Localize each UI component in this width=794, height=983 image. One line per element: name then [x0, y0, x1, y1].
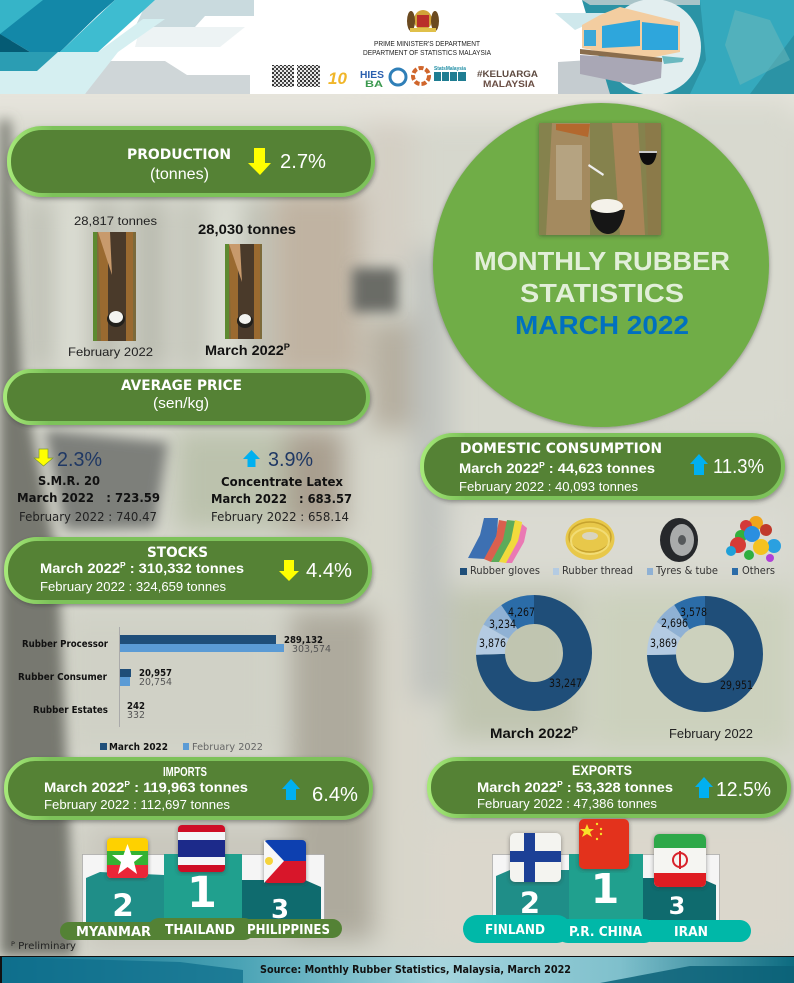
exports text: [477, 763, 673, 811]
podium: import sources: 3: [271, 895, 289, 925]
bars: rubber consumer: 20,754: [139, 677, 172, 688]
chart legend: March 2022: [109, 742, 168, 753]
country labels: IRAN: [674, 925, 708, 940]
country labels: [60, 918, 342, 940]
donut chart: March 2022: 33,247: [549, 676, 582, 690]
stocks text: STOCKS: [147, 545, 208, 561]
bars: rubber processor: 303,574: [292, 644, 331, 655]
exports text: P: [557, 780, 563, 789]
donut chart: February 2022: 2,696: [661, 616, 688, 630]
production heading: [127, 147, 231, 183]
donut chart: February 2022: February 2022: [669, 727, 753, 741]
icon: rubber thread: [566, 518, 614, 560]
stocks text: February 2022 : 324,659 tonnes: [40, 580, 226, 594]
header left geometric shapes: [0, 0, 254, 94]
flag: Philippines: [264, 840, 306, 883]
production comparison: [68, 214, 296, 359]
chart legend: February 2022: [192, 742, 263, 753]
title circle: [433, 103, 769, 427]
S.M.R. 20 price block: 2.3%: [57, 449, 102, 471]
title text: MONTHLY RUBBER: [474, 246, 730, 276]
icon: balloons: [726, 516, 781, 562]
donut chart: March 2022: P: [572, 725, 578, 735]
consumption legend: Rubber thread: [562, 565, 633, 577]
bars: rubber processor: Rubber Processor: [22, 639, 108, 650]
concentrate latex price block: Concentrate Latex: [221, 475, 343, 489]
icon: up arrow: [243, 450, 260, 467]
donut chart: March 2022: 4,267: [508, 605, 535, 619]
title text: STATISTICS: [520, 278, 684, 308]
flag: Iran: [654, 834, 706, 887]
donut chart: February 2022: [650, 605, 753, 741]
icon: up arrow: [690, 454, 708, 475]
partner logos row: [272, 65, 538, 90]
february production: [68, 214, 157, 359]
donut chart: March 2022: March 2022: [490, 725, 566, 741]
march production: March 2022: [205, 342, 281, 358]
S.M.R. 20 price block: February 2022 : 740.47: [19, 510, 157, 524]
partner logos row: StatsMalaysia: [434, 66, 467, 72]
imports change: 6.4%: [312, 784, 358, 806]
title text: [474, 246, 730, 340]
exports change: 12.5%: [716, 779, 771, 801]
product icons and legend: [460, 516, 781, 577]
bars: rubber consumer: [18, 668, 172, 688]
bars: rubber estates: Rubber Estates: [33, 705, 108, 716]
podium: import sources: 2: [112, 888, 134, 924]
imports text: : 119,963 tonnes: [130, 779, 248, 795]
footer band with source: [0, 956, 794, 983]
imports text: February 2022 : 112,697 tonnes: [44, 798, 230, 812]
country labels: FINLAND: [485, 923, 545, 938]
consumption legend: Others: [742, 565, 775, 577]
domestic consumption text: P: [539, 461, 545, 470]
flag: Thailand: [178, 825, 225, 872]
domestic consumption text: DOMESTIC CONSUMPTION: [460, 441, 662, 457]
flag: China: [579, 819, 629, 869]
panel: domestic consumption: [422, 435, 783, 498]
podium: export destinations: 1: [591, 865, 619, 913]
average price heading: [121, 378, 242, 412]
domestic consumption text: : 44,623 tonnes: [545, 460, 655, 476]
concentrate latex price block: 3.9%: [268, 449, 313, 471]
bars: rubber estates: 242: [127, 701, 145, 712]
country labels: THAILAND: [165, 923, 235, 938]
consumption legend: Rubber gloves: [470, 565, 540, 577]
imports text: IMPORTS: [163, 765, 207, 779]
footnote: preliminary: Preliminary: [15, 941, 76, 952]
source text: Source: Monthly Rubber Statistics, Malaysia, March 2022: [260, 963, 571, 976]
podium: export destinations: 2: [520, 886, 540, 920]
bars: rubber estates: [33, 701, 145, 721]
domestic consumption text: March 2022: [459, 460, 535, 476]
podium: import sources: [60, 825, 342, 940]
march production: 28,030 tonnes: [198, 222, 296, 237]
department name: PRIME MINISTER'S DEPARTMENT: [374, 39, 480, 48]
donut chart: March 2022: 3,234: [489, 617, 516, 631]
average price heading: (sen/kg): [153, 395, 209, 412]
department name: DEPARTMENT OF STATISTICS MALAYSIA: [363, 48, 491, 57]
march production: P: [284, 342, 290, 352]
exports text: February 2022 : 47,386 tonnes: [477, 797, 657, 811]
podium: import sources: 1: [187, 868, 217, 918]
february production: 28,817 tonnes: [74, 214, 157, 228]
panel: imports: [6, 759, 371, 818]
donut chart: February 2022: 3,869: [650, 636, 677, 650]
flag: Myanmar: [107, 838, 148, 878]
chart legend: [100, 742, 263, 753]
consumption legend: [460, 565, 775, 577]
imports text: P: [124, 780, 131, 789]
icon: rubber gloves: [468, 518, 527, 563]
stocks text: P: [120, 561, 126, 570]
country labels: MYANMAR: [76, 925, 151, 940]
partner logos row: 10: [328, 69, 347, 88]
title text: MARCH 2022: [515, 310, 689, 340]
header right building graphic: [555, 0, 794, 95]
partner logos row: BA: [365, 79, 384, 89]
panel: stocks: [6, 539, 370, 602]
concentrate latex price block: February 2022 : 658.14: [211, 510, 349, 524]
stocks text: March 2022: [40, 560, 116, 576]
icon: down arrow: [279, 560, 299, 581]
footnote: preliminary: P: [11, 941, 15, 948]
bars: rubber processor: [22, 635, 331, 655]
panel: exports: [429, 759, 789, 816]
photo: tapped rubber trees: [539, 123, 661, 235]
partner logos row: MALAYSIA: [483, 79, 535, 90]
department name: [363, 39, 491, 57]
icon: up arrow: [282, 779, 300, 800]
country labels: P.R. CHINA: [569, 925, 642, 940]
government crest: [407, 10, 439, 32]
partner logos row: #KELUARGA: [477, 69, 538, 80]
partner logos row: HIES: [360, 70, 384, 81]
imports text: [44, 765, 248, 812]
stocks change: 4.4%: [306, 560, 352, 582]
country labels: PHILIPPINES: [247, 923, 330, 938]
podium: export destinations: [463, 819, 751, 943]
domestic consumption text: February 2022 : 40,093 tonnes: [459, 480, 638, 494]
bars: rubber processor: 289,132: [284, 635, 323, 646]
S.M.R. 20 price block: [17, 449, 160, 524]
panel: average price: [5, 371, 368, 423]
imports text: March 2022: [44, 779, 120, 795]
podium: export destinations: 3: [669, 892, 685, 920]
bars: rubber consumer: Rubber Consumer: [18, 672, 107, 683]
S.M.R. 20 price block: March 2022 : 723.59: [17, 491, 160, 505]
production change: 2.7%: [280, 151, 326, 173]
donut chart: March 2022: 3,876: [479, 636, 506, 650]
production heading: (tonnes): [150, 166, 209, 183]
domestic consumption text: [459, 441, 662, 494]
exports text: : 53,328 tonnes: [563, 779, 673, 795]
production heading: PRODUCTION: [127, 147, 231, 163]
flag: Finland: [510, 833, 561, 882]
icon: down arrow: [34, 449, 53, 466]
average price heading: AVERAGE PRICE: [121, 378, 242, 394]
panel: production: [9, 128, 373, 195]
exports text: EXPORTS: [572, 763, 632, 778]
donut chart: February 2022: 29,951: [720, 678, 753, 692]
bars: rubber estates: 332: [127, 710, 145, 721]
february production: February 2022: [68, 345, 153, 359]
bar chart: stocks by holder: [18, 627, 331, 753]
icon: up arrow: [695, 777, 713, 798]
concentrate latex price block: March 2022 : 683.57: [211, 492, 352, 506]
march production: [198, 222, 296, 358]
exports text: March 2022: [477, 779, 553, 795]
consumption legend: Tyres & tube: [655, 565, 718, 577]
icon: tyre: [660, 518, 698, 562]
donut chart: March 2022: [479, 605, 582, 741]
S.M.R. 20 price block: S.M.R. 20: [38, 474, 100, 488]
consumption change: 11.3%: [713, 456, 764, 478]
stocks text: : 310,332 tonnes: [126, 560, 244, 576]
donut chart: February 2022: 3,578: [680, 605, 707, 619]
bars: rubber consumer: 20,957: [139, 668, 172, 679]
country labels: [463, 915, 751, 943]
stocks text: [40, 545, 244, 594]
concentrate latex price block: [211, 449, 352, 524]
icon: down arrow: [248, 148, 271, 175]
header banner: [0, 0, 794, 95]
